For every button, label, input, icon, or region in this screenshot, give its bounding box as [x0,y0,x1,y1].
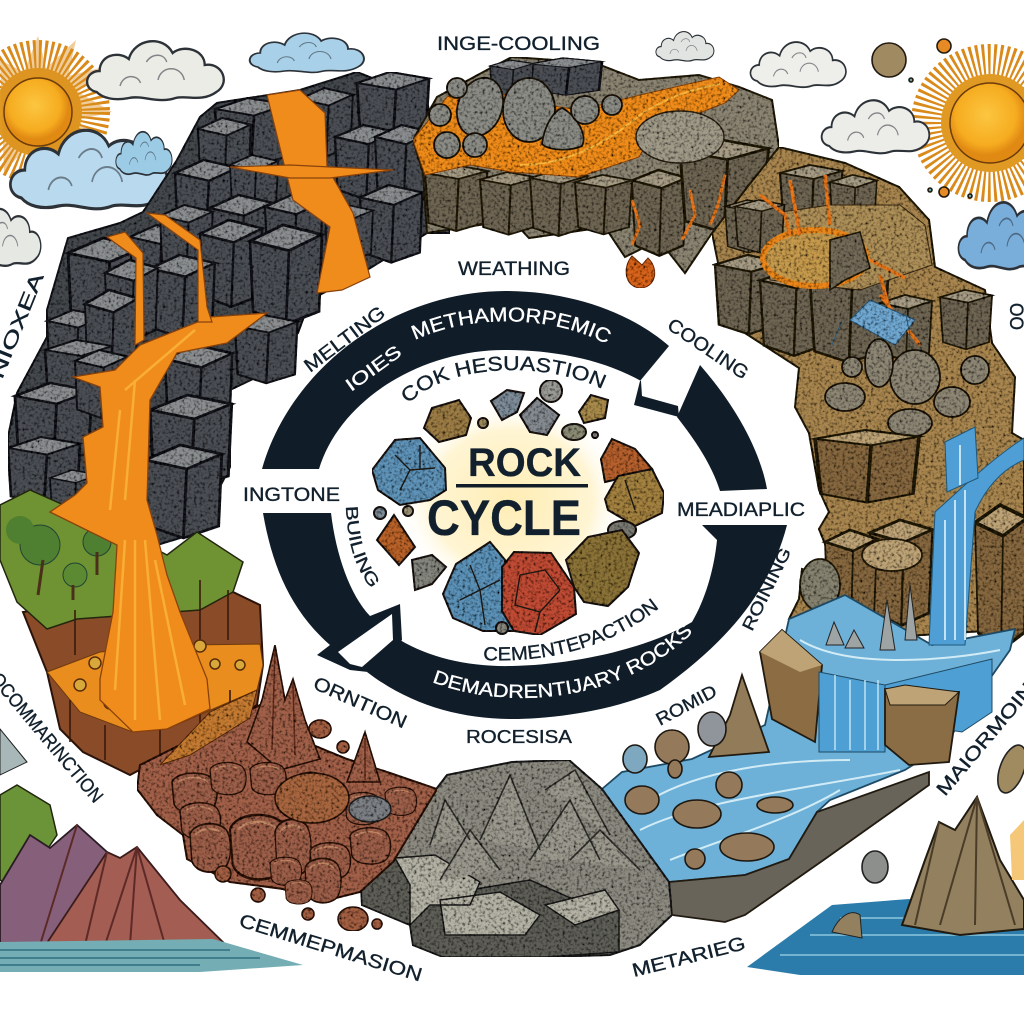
labels: METHAMORPEMIC [411,307,611,342]
waterfall [929,427,1024,645]
labels: METARIEG [630,933,748,982]
center glow [397,400,627,600]
labels: CEMMEPMASION [237,911,424,986]
lava texture [110,330,195,720]
labels: INGTONE [243,485,340,506]
labels: COK HESUASTION [402,356,606,401]
labels: MELTING [300,302,390,377]
title: ROCK CYCLE: ROCK [468,441,581,485]
lava streams upper left [107,90,393,345]
labels: COOLING [663,315,752,384]
panel: right terraces [712,147,1024,650]
panel: background mountain and sea right [747,741,1024,975]
icon: left sun [0,36,112,180]
labels: ROCESISA [466,727,572,747]
panel: red-brown sedimentary rocks [137,645,437,931]
waterfall highlights [945,445,965,640]
labels: ROMID [652,681,720,730]
icon: floating pebbles [872,39,972,198]
labels: CEMENTEPACTION [484,598,658,661]
labels: DEMADRENTIJARY ROCKS [433,626,691,698]
labels: INGE-COOLING [437,34,600,55]
clouds [0,32,1024,269]
icon: right sun [930,63,1024,183]
labels: BUILING [346,507,378,587]
panel: dark basalt cliffs [8,72,450,545]
cycle arrows [262,291,787,719]
panel: grey central mountain [360,760,672,957]
panel: water platform [602,585,1015,922]
title: ROCK CYCLE: CYCLE [427,490,581,546]
title: ROCK CYCLE [427,441,588,546]
labels: ROINING [739,545,795,634]
labels: MAIORMOIN [933,679,1024,800]
center rock cluster [372,380,664,635]
labels: WEATHING [458,259,570,280]
labels: MEADIAPLIC [677,500,805,521]
labels: IOIES [342,341,405,395]
rock cracks [395,445,635,632]
lava flow lower cascade [50,313,267,732]
panel: green and lava plateau lower left [0,490,263,775]
panel: top plateau [413,57,779,288]
panel: background mountains left [0,729,303,972]
labels: ORNTION [310,673,410,733]
